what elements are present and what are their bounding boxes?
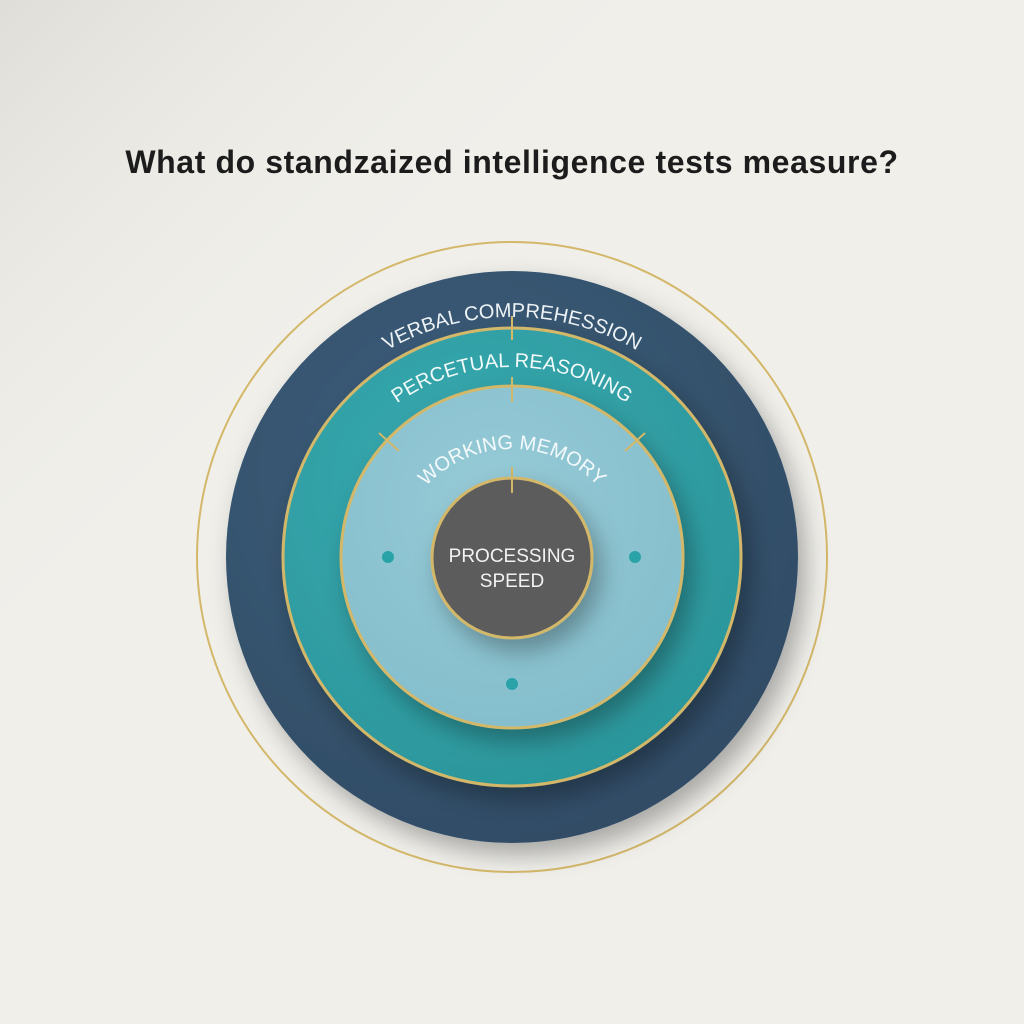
ring: perceptual reasoning <box>282 326 758 806</box>
center: processing speed: SPEED <box>480 571 544 592</box>
dots <box>382 551 641 690</box>
ring: working memory <box>336 384 703 752</box>
center: processing speed: PROCESSING <box>449 546 575 567</box>
ring: perceptual reasoning: PERCETUAL REASONING <box>390 353 632 402</box>
tick marks <box>379 316 645 493</box>
title: What do standzaized intelligence tests measure? <box>125 144 899 180</box>
center: processing speed <box>432 478 592 638</box>
outer gold ring <box>197 242 827 872</box>
ring: working memory: WORKING MEMORY <box>416 435 608 484</box>
ring: verbal comprehension: VERBAL COMPREHESSION <box>380 303 642 350</box>
